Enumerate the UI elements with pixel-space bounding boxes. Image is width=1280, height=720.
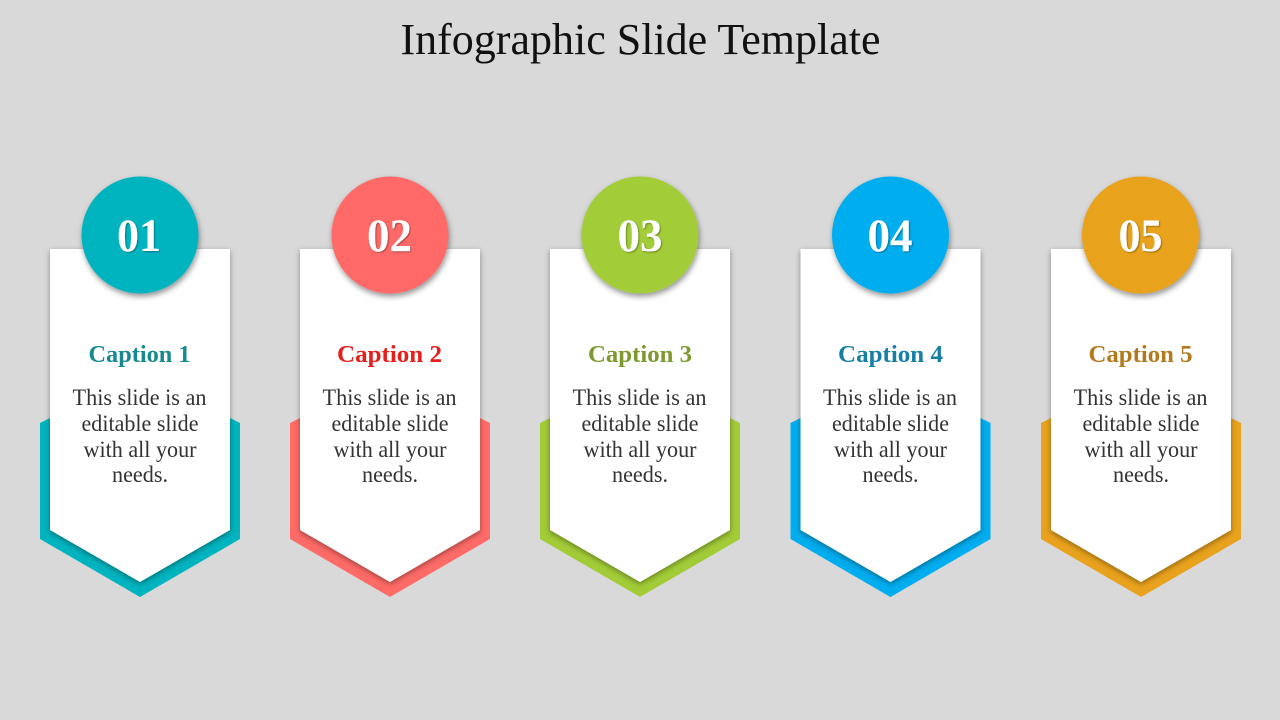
description 1: editable slide <box>82 411 198 436</box>
number badge 2 <box>332 176 448 294</box>
description 5 <box>1074 385 1208 487</box>
description 4: editable slide <box>832 411 949 436</box>
description 3: This slide is an <box>572 385 707 410</box>
description 5: with all your <box>1084 437 1198 462</box>
description 5: This slide is an <box>1074 385 1208 410</box>
description 2 <box>322 385 457 487</box>
description 5: editable slide <box>1082 411 1200 436</box>
description 2: needs. <box>362 462 418 487</box>
white card 1 <box>50 249 230 582</box>
white card 5 <box>1051 249 1231 582</box>
caption 5: Caption 5 <box>1088 342 1192 368</box>
backing chevron 4 <box>790 418 990 597</box>
description 5: needs. <box>1113 462 1169 487</box>
description 2: with all your <box>334 437 447 462</box>
description 4 <box>823 385 957 487</box>
description 1: This slide is an <box>72 385 207 410</box>
number badge 4: 04 <box>868 210 912 262</box>
caption 2: Caption 2 <box>337 342 442 368</box>
number badge 3: 03 <box>618 210 662 262</box>
number badge 1 <box>82 176 198 294</box>
description 4: This slide is an <box>823 385 957 410</box>
panel: step 5 <box>1041 176 1241 597</box>
description 3: with all your <box>584 437 697 462</box>
description 1: with all your <box>84 437 197 462</box>
panel: step 3 <box>540 176 740 597</box>
white card 4 <box>800 249 980 582</box>
number badge 2: 02 <box>367 210 412 262</box>
backing chevron 3 <box>540 418 740 597</box>
backing chevron 5 <box>1041 418 1241 597</box>
description 1: needs. <box>112 462 168 487</box>
description 1 <box>72 385 207 487</box>
description 2: This slide is an <box>322 385 457 410</box>
caption 1: Caption 1 <box>88 342 190 368</box>
number badge 3 <box>582 176 698 294</box>
white card 2 <box>300 249 480 582</box>
white card 3 <box>550 249 730 582</box>
caption 4: Caption 4 <box>838 342 943 368</box>
description 3 <box>572 385 707 487</box>
number badge 5: 05 <box>1118 210 1162 262</box>
backing chevron 2 <box>290 418 490 597</box>
description 3: editable slide <box>582 411 698 436</box>
number badge 4 <box>832 176 949 294</box>
backing chevron 1 <box>40 418 240 597</box>
panel: step 1 <box>40 176 240 597</box>
caption 3: Caption 3 <box>588 342 692 368</box>
title: Infographic Slide Template <box>400 15 880 64</box>
panel: step 4 <box>790 176 990 597</box>
description 3: needs. <box>612 462 668 487</box>
number badge 1: 01 <box>117 210 161 262</box>
description 2: editable slide <box>332 411 448 436</box>
description 4: with all your <box>834 437 947 462</box>
description 4: needs. <box>862 462 918 487</box>
number badge 5 <box>1082 176 1199 294</box>
panel: step 2 <box>290 176 490 597</box>
